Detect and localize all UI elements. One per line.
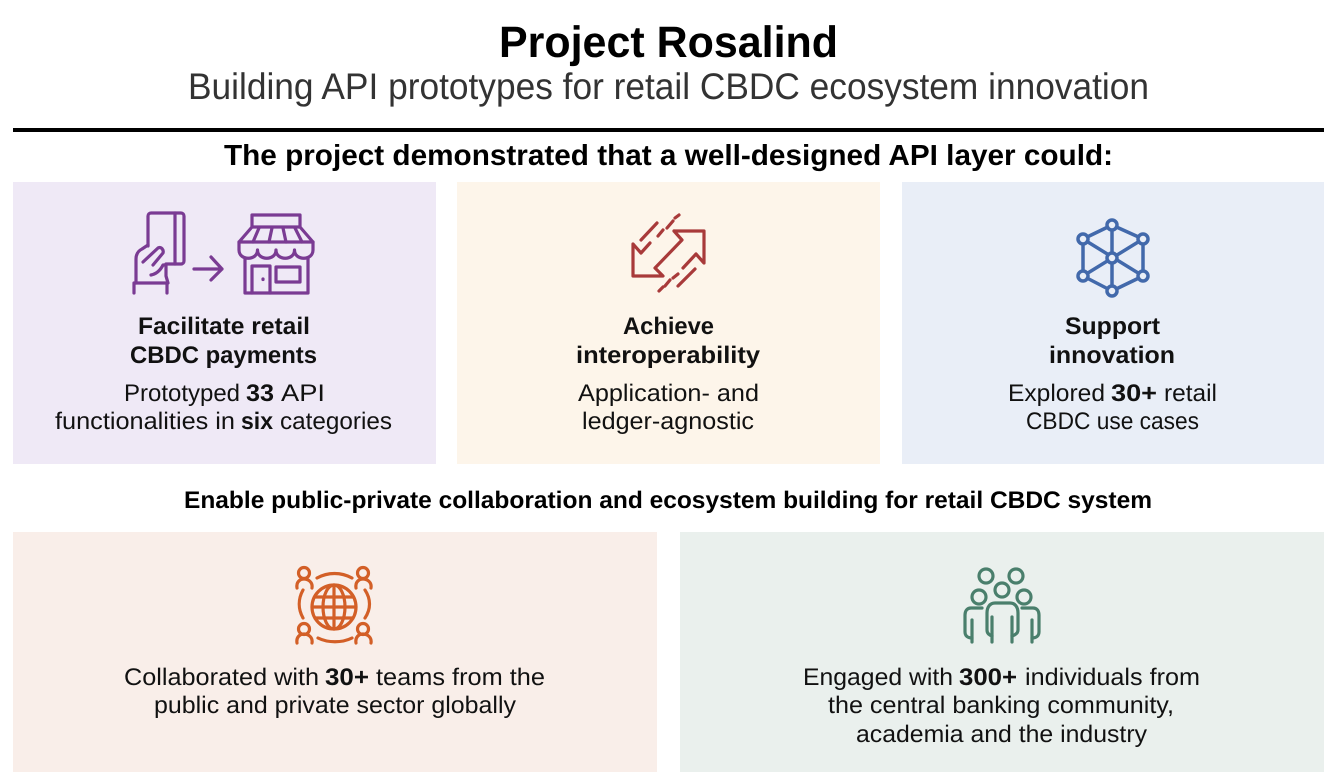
panel text: 30+ — [1111, 380, 1157, 407]
panel text: 30+ — [325, 664, 369, 691]
panel: collaboration — [13, 532, 657, 772]
panel heading — [576, 313, 761, 369]
panel text: API — [281, 380, 325, 407]
title: Project Rosalind — [499, 18, 838, 67]
panel text — [1008, 380, 1217, 435]
subtitle: Building API prototypes for retail CBDC ecosystem innovation — [188, 66, 1149, 107]
section heading: collaboration: Enable public-private collaboration and ecosystem building for retail CBDC system — [184, 487, 1152, 514]
panel text — [803, 664, 1200, 748]
icon: people around a globe — [297, 568, 371, 643]
panel text: 33 — [246, 380, 274, 407]
panel text: Explored — [1008, 380, 1105, 407]
icon: hand with card paying a shop — [134, 213, 313, 293]
section heading: API layer: The project demonstrated that a well-designed API layer could: — [224, 140, 1113, 172]
panel heading: innovation — [1049, 342, 1175, 369]
panel heading: interoperability — [576, 342, 761, 369]
panel text: retail — [1164, 380, 1217, 407]
panel text: public and private sector globally — [154, 692, 516, 719]
panel text — [55, 380, 392, 435]
panel heading: Achieve — [623, 313, 714, 340]
panel text: teams from the — [376, 664, 545, 691]
panel text: Application- and — [578, 380, 759, 407]
panel: facilitate retail CBDC payments — [13, 182, 436, 464]
panel text: CBDC use cases — [1026, 408, 1199, 435]
panel heading: CBDC payments — [130, 342, 317, 369]
panel: support innovation — [902, 182, 1324, 464]
panel text: academia and the industry — [856, 721, 1147, 748]
icon: opposing arrows — [633, 215, 704, 291]
icon: group of people — [965, 569, 1039, 642]
panel text: Prototyped — [124, 380, 240, 407]
panel text: individuals from — [1025, 664, 1200, 691]
icon: hexagon network — [1078, 220, 1148, 296]
panel: engagement — [680, 532, 1324, 772]
panel text: ledger-agnostic — [582, 408, 754, 435]
panel text: six — [241, 408, 274, 435]
panel heading — [130, 313, 317, 369]
panel text — [578, 380, 759, 435]
panel text: Engaged with — [803, 664, 953, 691]
panel: achieve interoperability — [457, 182, 880, 464]
panel heading — [1049, 313, 1175, 369]
panel text: the central banking community, — [828, 692, 1174, 719]
panel text: 300+ — [959, 664, 1017, 691]
panel text: functionalities in — [55, 408, 235, 435]
panel text — [124, 664, 545, 719]
panel text: Collaborated with — [124, 664, 319, 691]
panel text: categories — [280, 408, 392, 435]
panel heading: Facilitate retail — [138, 313, 310, 340]
panel heading: Support — [1065, 313, 1160, 340]
